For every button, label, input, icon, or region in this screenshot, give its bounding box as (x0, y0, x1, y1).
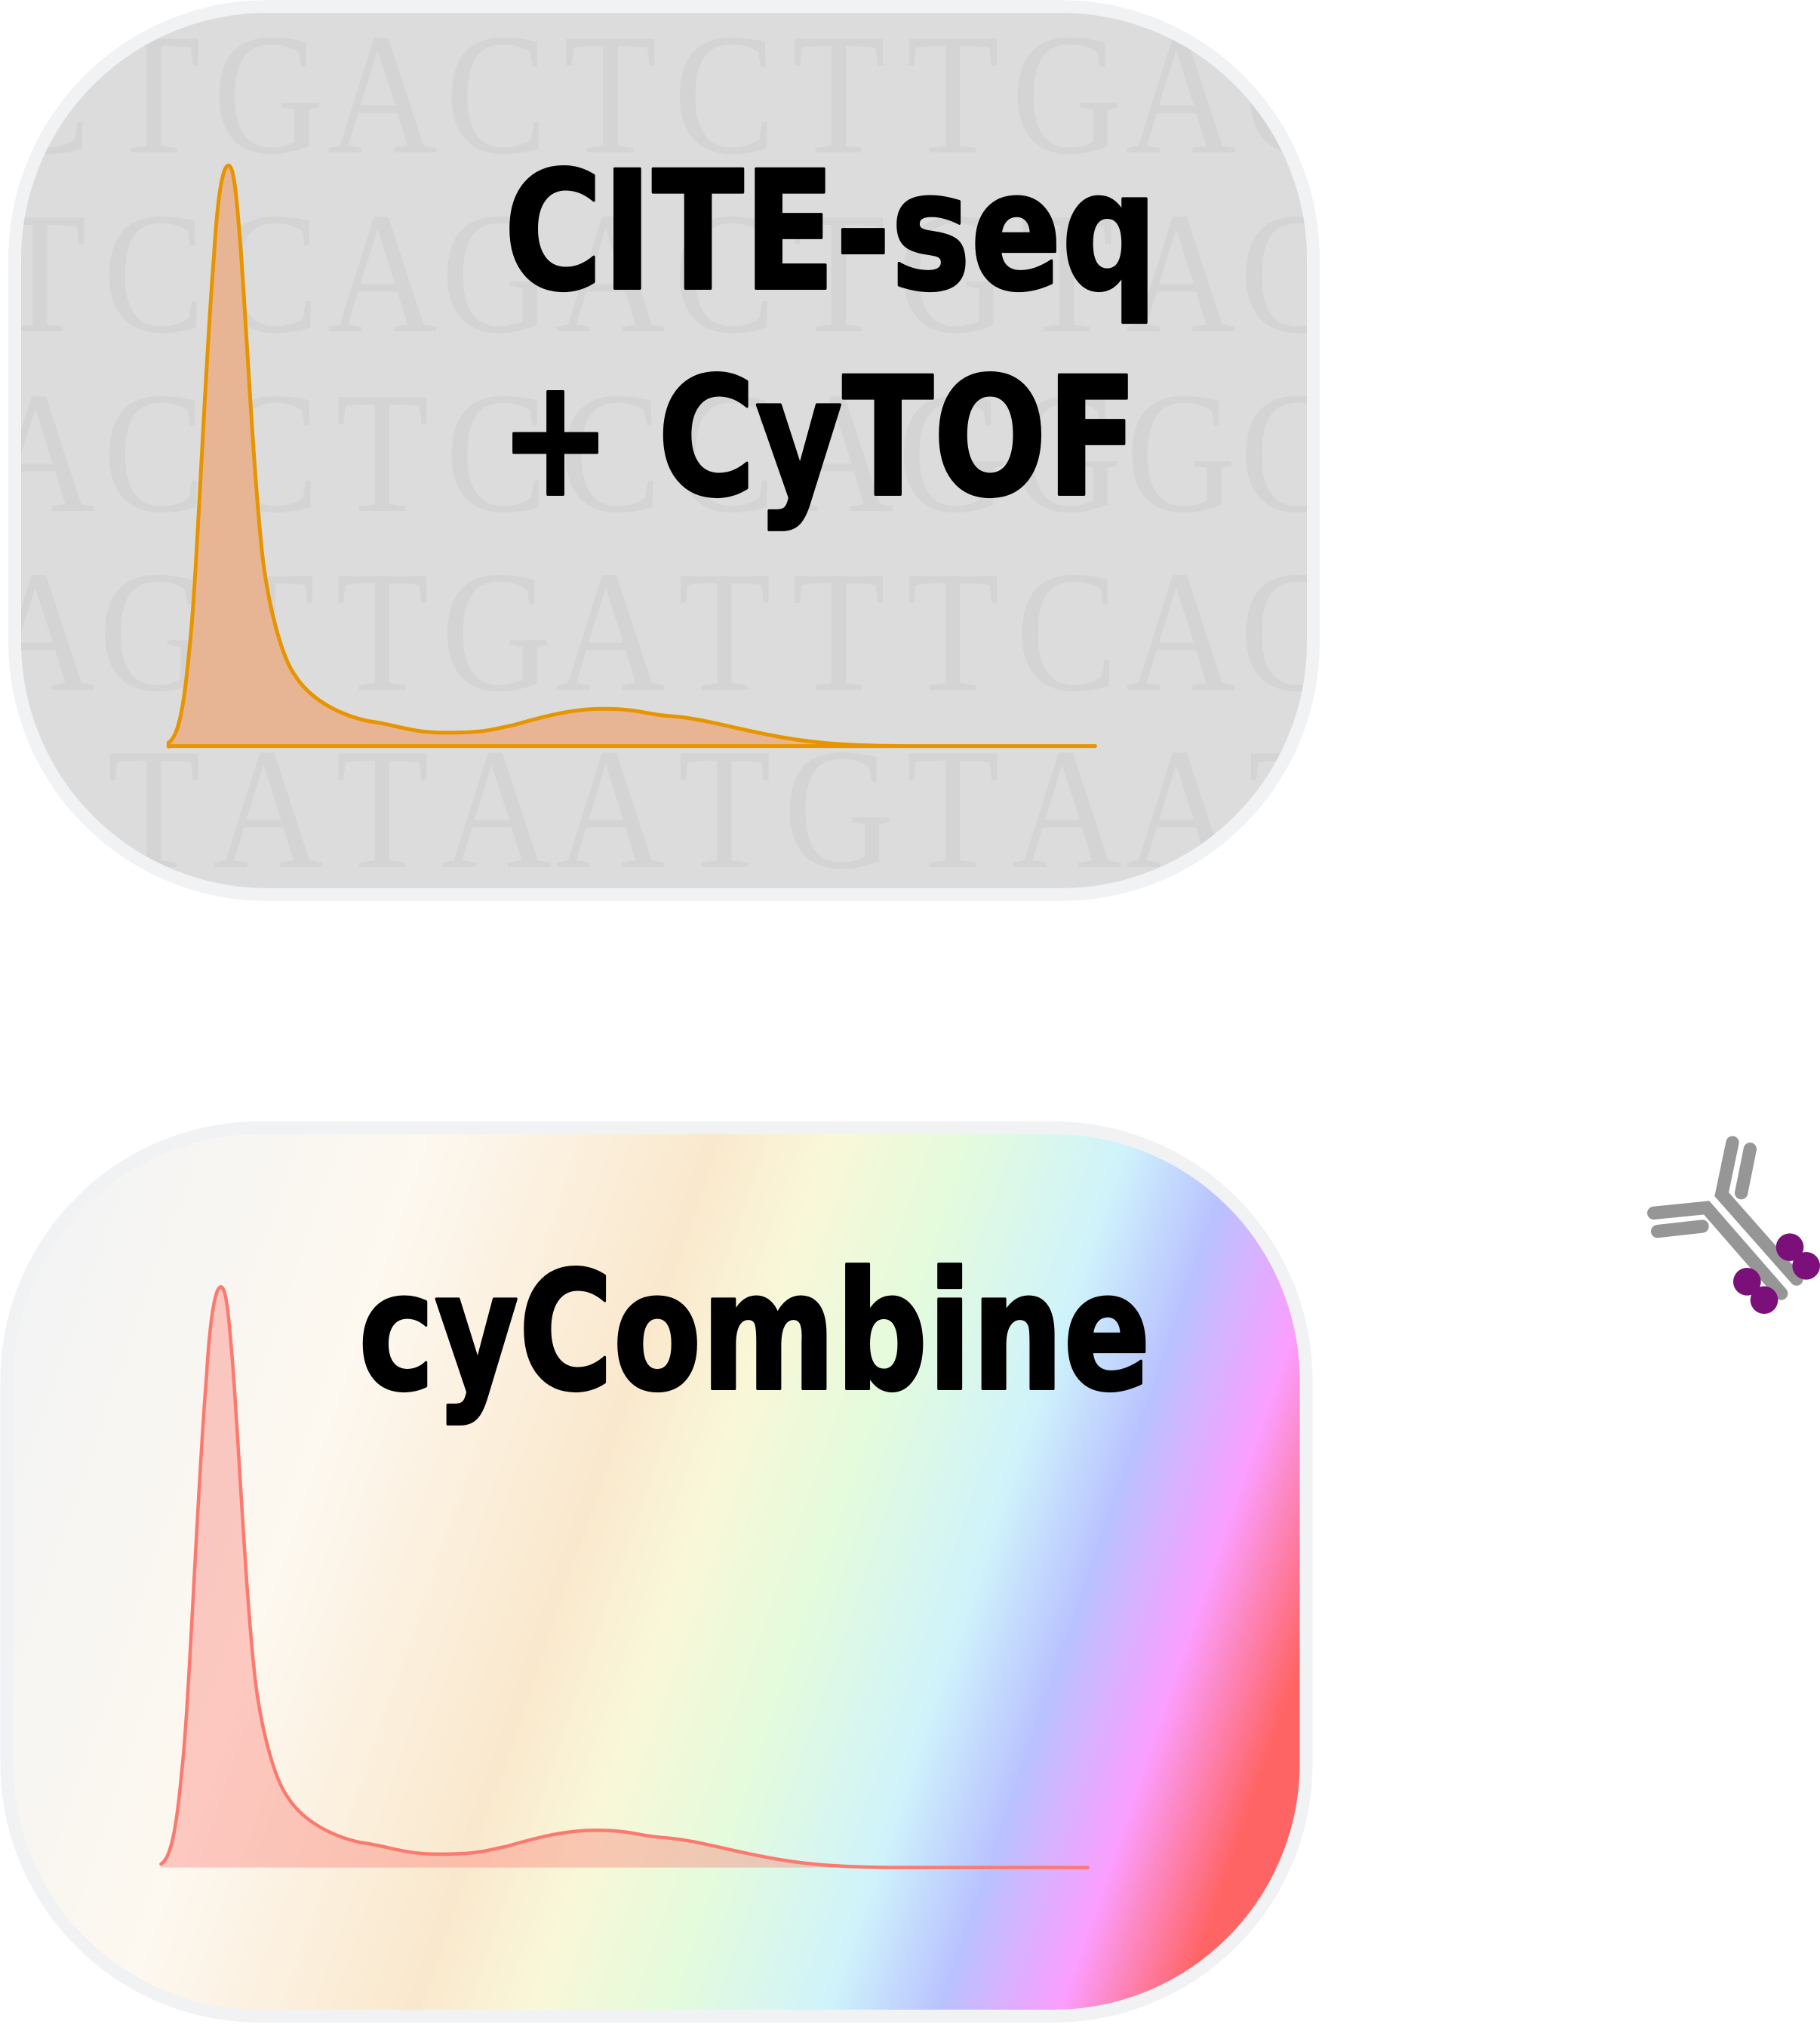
background DNA letters: AGTTGATTTCAG (0, 535, 1350, 727)
panel: cyCombine (7, 1127, 1306, 2016)
icon: antibody with metal tags (1654, 1143, 1820, 1314)
panel background (15, 6, 1313, 895)
background DNA letters: CTGACTCTTGAC (0, 0, 1346, 190)
panel: CITE-seq + CyTOF (0, 0, 1350, 905)
heading: + CyTOF: + CyTOF (500, 343, 1138, 534)
heading: CITE-seq: CITE-seq (504, 137, 1157, 328)
background DNA letters: TCCAGACTGTAG (0, 177, 1350, 369)
heading: cyCombine: cyCombine (358, 1238, 1151, 1428)
background DNA letters: TATAATGTAAT (107, 712, 1342, 905)
antibody heavy chain lower (1654, 1207, 1782, 1293)
antibody light chain upper (1742, 1149, 1750, 1193)
antibody heavy chain upper (1722, 1143, 1797, 1279)
density curve: coral (161, 1287, 1088, 1868)
curve line (161, 1287, 1088, 1868)
antibody light chain lower (1658, 1226, 1702, 1232)
density curve: orange (168, 165, 1096, 746)
background DNA letters (0, 0, 1350, 905)
curve fill (161, 1287, 891, 1868)
background DNA letters: ACCTCCCAGGGG (0, 356, 1350, 549)
metal tags (1733, 1233, 1820, 1314)
rainbow panel with border (7, 1127, 1306, 2016)
panel border (15, 6, 1313, 895)
